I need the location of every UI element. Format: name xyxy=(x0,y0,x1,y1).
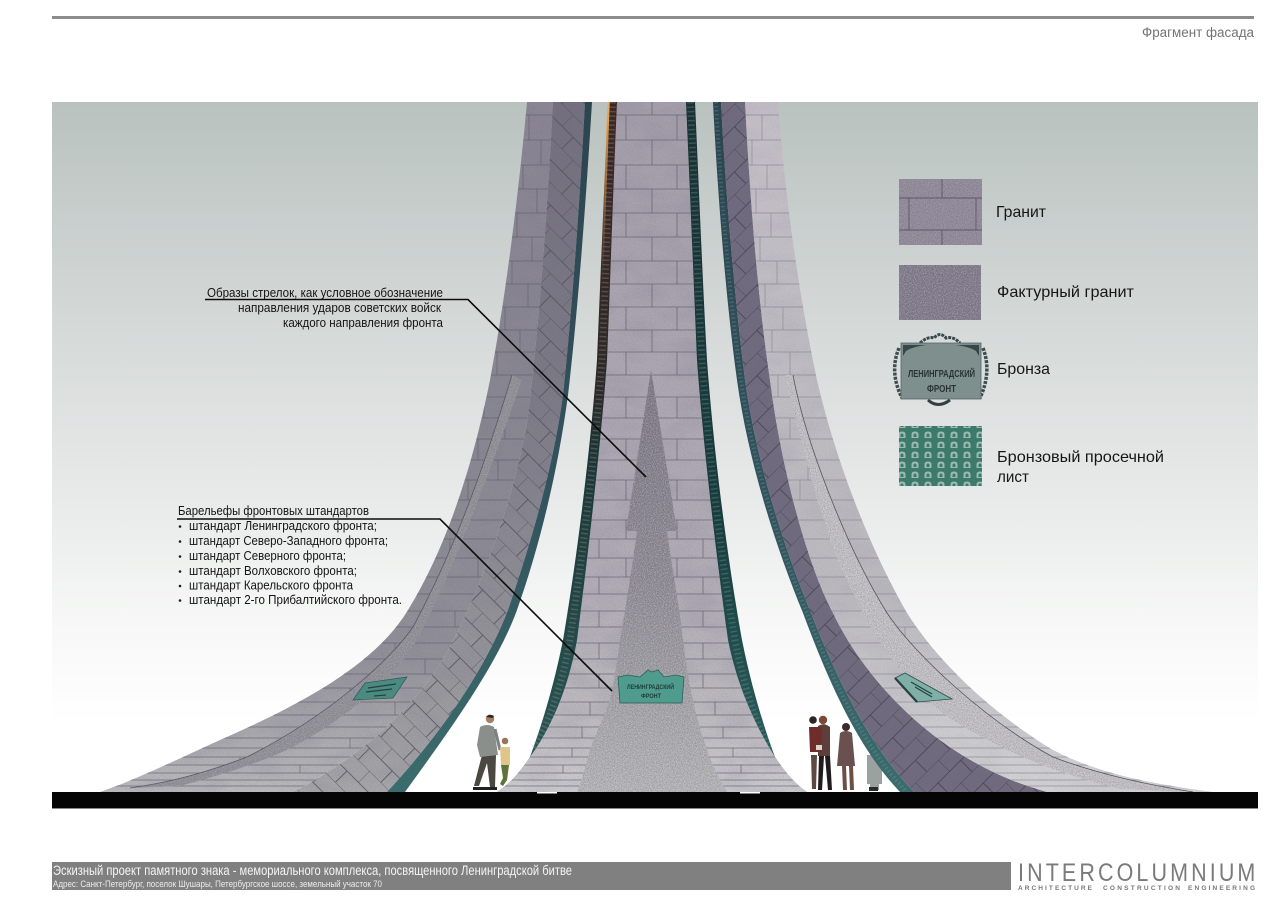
ground slab xyxy=(52,792,1258,809)
legend item: bronze: Бронза xyxy=(997,361,1050,378)
callout: front standards bas-reliefs: штандарт Волховского фронта; xyxy=(189,564,357,578)
right wing xyxy=(713,102,1212,792)
callout: front standards bas-reliefs: штандарт 2-го Прибалтийского фронта. xyxy=(189,593,402,607)
top rule xyxy=(52,16,1254,19)
arrow motif xyxy=(570,368,735,792)
figure: woman xyxy=(818,716,832,790)
logo: Intercolumnium: ARCHITECTURE xyxy=(1018,885,1093,892)
plaque right xyxy=(895,673,952,702)
footer bar: Адрес: Санкт-Петербург, поселок Шушары, Петербургское шоссе, земельный участок 70 xyxy=(53,879,382,890)
plaque centre: Leningrad front: ЛЕНИНГРАДСКИЙ xyxy=(627,683,674,691)
callout: front standards bas-reliefs: штандарт Северного фронта; xyxy=(189,549,346,563)
figure: boy xyxy=(500,738,510,786)
callout: arrow images: каждого направления фронта xyxy=(283,316,443,330)
figures: man and boy xyxy=(473,715,510,790)
legend item: granite: Гранит xyxy=(996,204,1047,221)
legend item: pierced bronze sheet: лист xyxy=(997,469,1030,486)
left wing xyxy=(100,102,592,792)
legend item: bronze: ЛЕНИНГРАДСКИЙ xyxy=(908,367,975,380)
callout: front standards bas-reliefs: Барельефы фронтовых штандартов xyxy=(178,504,369,518)
legend item: bronze xyxy=(895,334,1050,404)
textured granite band xyxy=(785,375,1195,792)
legend item: pierced bronze sheet: Бронзовый просечной xyxy=(997,449,1164,466)
legend item: pierced bronze sheet xyxy=(899,426,1164,486)
legend item: bronze: ФРОНТ xyxy=(927,384,956,395)
callout: arrow images xyxy=(205,286,646,477)
legend item: textured granite: Фактурный гранит xyxy=(997,284,1135,301)
plaque centre: Leningrad front: ФРОНТ xyxy=(641,694,661,700)
legend item: granite xyxy=(899,179,1047,245)
callout: front standards bas-reliefs xyxy=(177,504,612,691)
figure: girl xyxy=(837,723,855,790)
callout: arrow images: Образы стрелок, как условное обозначение xyxy=(207,286,443,300)
central tower xyxy=(497,102,807,792)
bronze edge strip xyxy=(387,102,592,792)
plaque left xyxy=(353,677,407,700)
logo: Intercolumnium: ENGINEERING xyxy=(1188,885,1255,892)
textured granite band xyxy=(130,375,525,792)
callout: arrow images: направления ударов советских войск xyxy=(238,301,441,315)
footer bar xyxy=(52,862,1011,890)
legend item: textured granite xyxy=(899,265,1135,320)
callout: front standards bas-reliefs: штандарт Северо-Западного фронта; xyxy=(189,534,388,548)
figures: woman with child, girl, adult xyxy=(809,716,882,791)
figure: man xyxy=(473,715,500,790)
legend: materials xyxy=(895,179,1164,486)
callout: front standards bas-reliefs: штандарт Ленинградского фронта; xyxy=(189,519,377,533)
figure: child xyxy=(809,716,822,789)
sheet title: Фрагмент фасада xyxy=(1142,25,1254,40)
logo: Intercolumnium: CONSTRUCTION xyxy=(1103,885,1180,892)
panel: facade drawing background xyxy=(52,102,1258,792)
plaque centre: Leningrad front xyxy=(618,670,684,703)
footer bar: Эскизный проект памятного знака - мемориального комплекса, посвященного Ленинградской битве xyxy=(53,863,572,878)
logo: Intercolumnium: INTERCOLUMNIUM xyxy=(1018,858,1255,886)
callout: front standards bas-reliefs: штандарт Карельского фронта xyxy=(189,578,353,592)
figure: adult behind wing xyxy=(867,755,882,791)
